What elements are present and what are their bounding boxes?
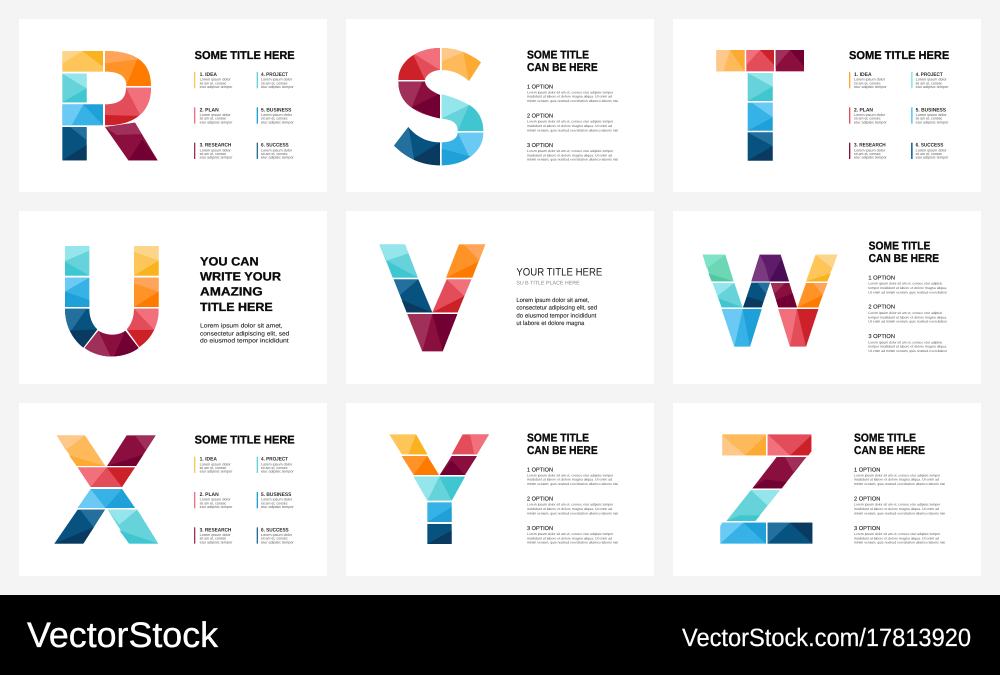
option 2: minim veniam, quis nostrud exercitation ullamco laboris nisi <box>854 512 945 515</box>
option 1: minim veniam, quis nostrud exercitation ullamco laboris nisi <box>854 482 945 486</box>
panel: letter R <box>19 19 327 192</box>
option 1: Ut enim ad minim veniam, quis nostrud exercitation <box>868 291 947 294</box>
item 2 plan: sit am et, consec <box>200 117 226 121</box>
option 3: tempor incididunt ut labore et dolore magna aliqua. <box>868 345 947 349</box>
option 2 <box>854 496 945 515</box>
item 4 project: Lorem ipsum dolor <box>916 78 947 82</box>
item 3 research <box>194 142 232 160</box>
option 3: incididunt ut labore et dolore magna aliqua. Ut enim ad <box>854 537 939 540</box>
body text: Lorem ipsum dolor sit amet, <box>200 322 283 329</box>
title: YOUR TITLE HERE <box>516 266 602 278</box>
item 2 plan: etur adipisic tempor <box>200 505 232 509</box>
option 3 <box>854 525 945 545</box>
item 4 project: Lorem ipsum dolor <box>261 462 292 466</box>
option 3: minim veniam, quis nostrud exercitation ullamco laboris nisi <box>854 541 945 545</box>
title: SOME TITLE <box>527 49 589 61</box>
footer banner <box>0 595 1000 675</box>
item 1 idea: 1. IDEA <box>854 72 872 77</box>
letter S graphic <box>392 47 485 167</box>
item 5 business: sit am et, consec <box>261 117 288 121</box>
item 6 success: sit am et, consec <box>261 152 288 156</box>
item 5 business: Lorem ipsum dolor <box>916 113 947 117</box>
option 2: 2 OPTION <box>854 496 880 502</box>
option 1: tempor incididunt ut labore et dolore magna aliqua. <box>868 286 947 290</box>
item 2 plan: Lorem ipsum dolor <box>200 113 231 117</box>
option 1 <box>527 466 618 486</box>
title: SOME TITLE <box>854 432 916 444</box>
item 5 business: sit am et, consec <box>261 501 288 505</box>
item 3 research: sit am et, consec <box>200 152 226 156</box>
item 1 idea: etur adipisic tempor <box>854 85 887 89</box>
item 6 success: 6. SUCCESS <box>916 142 943 148</box>
letter U graphic <box>63 246 160 360</box>
item 1 idea: etur adipisic tempor <box>200 85 232 89</box>
item 4 project: etur adipisic tempor <box>261 85 294 89</box>
item 3 research <box>194 527 232 544</box>
title <box>854 432 925 457</box>
option 1: minim veniam, quis nostrud exercitation ullamco laboris nisi <box>527 99 618 103</box>
option 3 <box>527 525 618 545</box>
item 4 project: 4. PROJECT <box>261 456 288 462</box>
item 6 success: sit am et, consec <box>261 537 288 541</box>
option 1: Lorem ipsum dolor sit am et, consec etur adipisic tempor <box>527 474 614 477</box>
option 1: Lorem ipsum dolor sit am et, consec etur adipisic tempor <box>527 91 614 94</box>
title: CAN BE HERE <box>869 252 939 265</box>
item 3 research: 3. RESEARCH <box>200 527 231 533</box>
item 1 idea <box>849 72 887 89</box>
option 2: 2 OPTION <box>527 113 553 119</box>
option 3: 3 OPTION <box>527 142 553 148</box>
option 3: Lorem ipsum dolor sit am et, consec etur adipisic tempor <box>527 532 614 536</box>
item 5 business <box>257 492 294 509</box>
item 6 success: etur adipisic tempor <box>261 156 294 160</box>
item 4 project: sit am et, consec <box>916 81 942 85</box>
item 3 research: etur adipisic tempor <box>200 156 232 160</box>
panel: letter Z <box>673 403 981 576</box>
option 2: Lorem ipsum dolor sit am et, consec etur adipisic tempor <box>527 120 614 124</box>
item 6 success: Lorem ipsum dolor <box>261 148 292 152</box>
option 2: 2 OPTION <box>868 304 895 310</box>
item 2 plan: 2. PLAN <box>200 492 219 497</box>
option 3: Ut enim ad minim veniam, quis nostrud exercitation <box>868 349 947 353</box>
title: SOME TITLE HERE <box>195 49 295 62</box>
title <box>869 240 939 265</box>
item 6 success <box>257 142 294 160</box>
item 3 research: Lorem ipsum dolor <box>854 148 885 152</box>
item 5 business <box>257 107 294 124</box>
body text: do eiusmod tempor incididunt <box>200 337 289 344</box>
letter W graphic <box>703 255 837 347</box>
title: TITLE HERE <box>200 300 273 314</box>
item 5 business: 5. BUSINESS <box>261 107 291 113</box>
letter R graphic <box>62 50 160 160</box>
option 1 <box>854 466 945 486</box>
item 5 business: etur adipisic tempor <box>916 120 948 124</box>
option 2: Lorem ipsum dolor sit am et, consec etur adipisic <box>868 311 942 315</box>
title: SOME TITLE HERE <box>849 49 949 62</box>
item 3 research <box>849 142 887 160</box>
item 5 business: Lorem ipsum dolor <box>261 498 292 502</box>
item 1 idea: Lorem ipsum dolor <box>200 462 231 466</box>
item 4 project <box>911 72 948 89</box>
option 3 <box>527 142 618 162</box>
item 3 research: etur adipisic tempor <box>854 156 887 160</box>
item 2 plan: Lorem ipsum dolor <box>854 113 885 117</box>
item 2 plan: etur adipisic tempor <box>854 120 887 124</box>
option 3: 3 OPTION <box>854 525 880 531</box>
option 3: minim veniam, quis nostrud exercitation ullamco laboris nisi <box>527 541 618 545</box>
title: CAN BE HERE <box>527 444 598 457</box>
item 2 plan: sit am et, consec <box>854 117 881 121</box>
title: SOME TITLE HERE <box>195 434 295 446</box>
title: WRITE YOUR <box>200 270 281 283</box>
item 6 success: etur adipisic tempor <box>261 540 294 544</box>
title: CAN BE HERE <box>854 444 925 457</box>
item 5 business: Lorem ipsum dolor <box>261 113 292 117</box>
letter V graphic <box>379 244 485 351</box>
item 6 success <box>257 527 294 544</box>
item 5 business: etur adipisic tempor <box>261 120 294 124</box>
item 1 idea: Lorem ipsum dolor <box>200 78 231 82</box>
item 4 project <box>257 72 294 89</box>
panel: letter S <box>346 19 654 192</box>
item 6 success: 6. SUCCESS <box>261 142 289 148</box>
panel: letter X <box>19 403 327 576</box>
item 5 business: sit am et, consec <box>916 117 942 121</box>
item 6 success: sit am et, consec <box>916 152 942 156</box>
title <box>527 432 598 457</box>
item 4 project: etur adipisic tempor <box>261 470 294 474</box>
item 3 research: sit am et, consec <box>200 537 226 541</box>
item 3 research: Lorem ipsum dolor <box>200 148 231 152</box>
option 2: minim veniam, quis nostrud exercitation ullamco laboris nisi <box>527 129 618 132</box>
item 4 project: 4. PROJECT <box>916 72 943 77</box>
item 6 success: Lorem ipsum dolor <box>916 148 947 152</box>
option 3: incididunt ut labore et dolore magna aliqua. Ut enim ad <box>527 154 612 157</box>
option 2: 2 OPTION <box>527 496 553 502</box>
item 1 idea: 1. IDEA <box>200 456 217 462</box>
item 4 project <box>257 456 294 474</box>
option 1: 1 OPTION <box>527 466 553 473</box>
item 4 project: 4. PROJECT <box>261 72 288 77</box>
item 4 project: sit am et, consec <box>261 81 288 85</box>
item 1 idea: sit am et, consec <box>200 466 226 470</box>
letter Y graphic <box>389 434 489 544</box>
item 2 plan: 2. PLAN <box>854 107 873 113</box>
item 3 research: Lorem ipsum dolor <box>200 533 231 537</box>
option 2: Lorem ipsum dolor sit am et, consec etur adipisic tempor <box>854 503 941 507</box>
option 3: 3 OPTION <box>868 333 895 339</box>
item 1 idea: sit am et, consec <box>200 81 226 85</box>
item 2 plan: Lorem ipsum dolor <box>200 498 231 502</box>
option 3: Lorem ipsum dolor sit am et, consec etur adipisic <box>868 341 942 344</box>
option 3: incididunt ut labore et dolore magna aliqua. Ut enim ad <box>527 537 612 540</box>
option 3: Lorem ipsum dolor sit am et, consec etur adipisic tempor <box>854 532 941 536</box>
option 1: Lorem ipsum dolor sit am et, consec etur adipisic <box>868 282 942 286</box>
item 6 success: etur adipisic tempor <box>916 156 948 160</box>
option 1: incididunt ut labore et dolore magna aliqua. Ut enim ad <box>854 478 939 482</box>
option 2 <box>868 304 947 324</box>
panel: letter Y <box>346 403 654 576</box>
letter Z graphic <box>720 434 812 544</box>
title: YOU CAN <box>200 254 259 268</box>
panel: letter V <box>346 211 654 384</box>
item 6 success: Lorem ipsum dolor <box>261 533 292 537</box>
title: SOME TITLE <box>527 432 589 444</box>
item 5 business: etur adipisic tempor <box>261 505 294 509</box>
item 6 success: 6. SUCCESS <box>261 527 289 533</box>
body text: Lorem ipsum dolor sit amet, <box>516 297 589 303</box>
title: CAN BE HERE <box>527 61 598 74</box>
option 3 <box>868 333 947 353</box>
item 4 project: sit am et, consec <box>261 466 288 470</box>
brand name: VectorStock <box>27 615 218 655</box>
option 2 <box>527 113 618 132</box>
item 4 project: etur adipisic tempor <box>916 85 948 89</box>
option 3: 3 OPTION <box>527 525 553 531</box>
option 3: minim veniam, quis nostrud exercitation ullamco laboris nisi <box>527 158 618 162</box>
item 3 research: sit am et, consec <box>854 152 881 156</box>
body text <box>200 322 289 344</box>
item 6 success <box>911 142 948 160</box>
item 1 idea: sit am et, consec <box>854 81 881 85</box>
item 5 business <box>911 107 948 124</box>
option 2: minim veniam, quis nostrud exercitation ullamco laboris nisi <box>527 512 618 515</box>
item 5 business: 5. BUSINESS <box>261 492 291 497</box>
item 2 plan <box>194 107 232 124</box>
body text: consectetur adipiscing elit, sed <box>200 330 289 337</box>
image reference: VectorStock.com/17813920 <box>682 624 971 652</box>
item 2 plan: 2. PLAN <box>200 107 219 113</box>
option 1: incididunt ut labore et dolore magna aliqua. Ut enim ad <box>527 478 612 482</box>
letter T graphic <box>716 50 804 161</box>
item 5 business: 5. BUSINESS <box>916 107 946 113</box>
item 3 research: etur adipisic tempor <box>200 540 232 544</box>
option 1: incididunt ut labore et dolore magna aliqua. Ut enim ad <box>527 95 612 99</box>
title <box>200 254 281 314</box>
item 1 idea <box>194 72 232 89</box>
letter X graphic <box>54 435 158 544</box>
item 2 plan <box>849 107 887 124</box>
body text: consectetur adipiscing elit, sed <box>516 304 597 311</box>
item 1 idea: 1. IDEA <box>200 72 217 77</box>
option 2 <box>527 496 618 515</box>
item 4 project: Lorem ipsum dolor <box>261 78 292 82</box>
option 1 <box>527 83 618 103</box>
item 1 idea: Lorem ipsum dolor <box>854 78 885 82</box>
option 2: incididunt ut labore et dolore magna aliqua. Ut enim ad <box>527 507 612 511</box>
item 2 plan <box>194 492 232 509</box>
option 2: Ut enim ad minim veniam, quis nostrud exercitation <box>868 320 947 324</box>
panel: letter U <box>19 211 327 384</box>
title: AMAZING <box>200 285 263 298</box>
body text: ut labore et dolore magna <box>516 320 585 326</box>
option 2: tempor incididunt ut labore et dolore magna aliqua. <box>868 316 947 319</box>
item 2 plan: etur adipisic tempor <box>200 120 232 124</box>
option 1: Lorem ipsum dolor sit am et, consec etur adipisic tempor <box>854 474 941 477</box>
item 1 idea <box>194 456 232 474</box>
panel: letter T <box>673 19 981 192</box>
body text <box>516 297 597 326</box>
item 3 research: 3. RESEARCH <box>854 142 886 148</box>
item 2 plan: sit am et, consec <box>200 501 226 505</box>
item 1 idea: etur adipisic tempor <box>200 470 232 474</box>
option 2: Lorem ipsum dolor sit am et, consec etur adipisic tempor <box>527 503 614 507</box>
title <box>527 49 598 74</box>
body text: do eiusmod tempor incididunt <box>516 312 596 319</box>
option 1: 1 OPTION <box>527 83 553 90</box>
option 1: 1 OPTION <box>854 466 880 473</box>
panel: letter W <box>673 211 981 384</box>
option 3: Lorem ipsum dolor sit am et, consec etur adipisic tempor <box>527 149 614 153</box>
option 2: incididunt ut labore et dolore magna aliqua. Ut enim ad <box>527 124 612 128</box>
subtitle: SU B TITLE PLACE HERE <box>516 280 580 286</box>
title: SOME TITLE <box>869 240 930 252</box>
option 1: 1 OPTION <box>868 274 895 281</box>
option 1: minim veniam, quis nostrud exercitation ullamco laboris nisi <box>527 482 618 486</box>
option 2: incididunt ut labore et dolore magna aliqua. Ut enim ad <box>854 507 939 511</box>
option 1 <box>868 274 947 294</box>
item 3 research: 3. RESEARCH <box>200 142 231 148</box>
